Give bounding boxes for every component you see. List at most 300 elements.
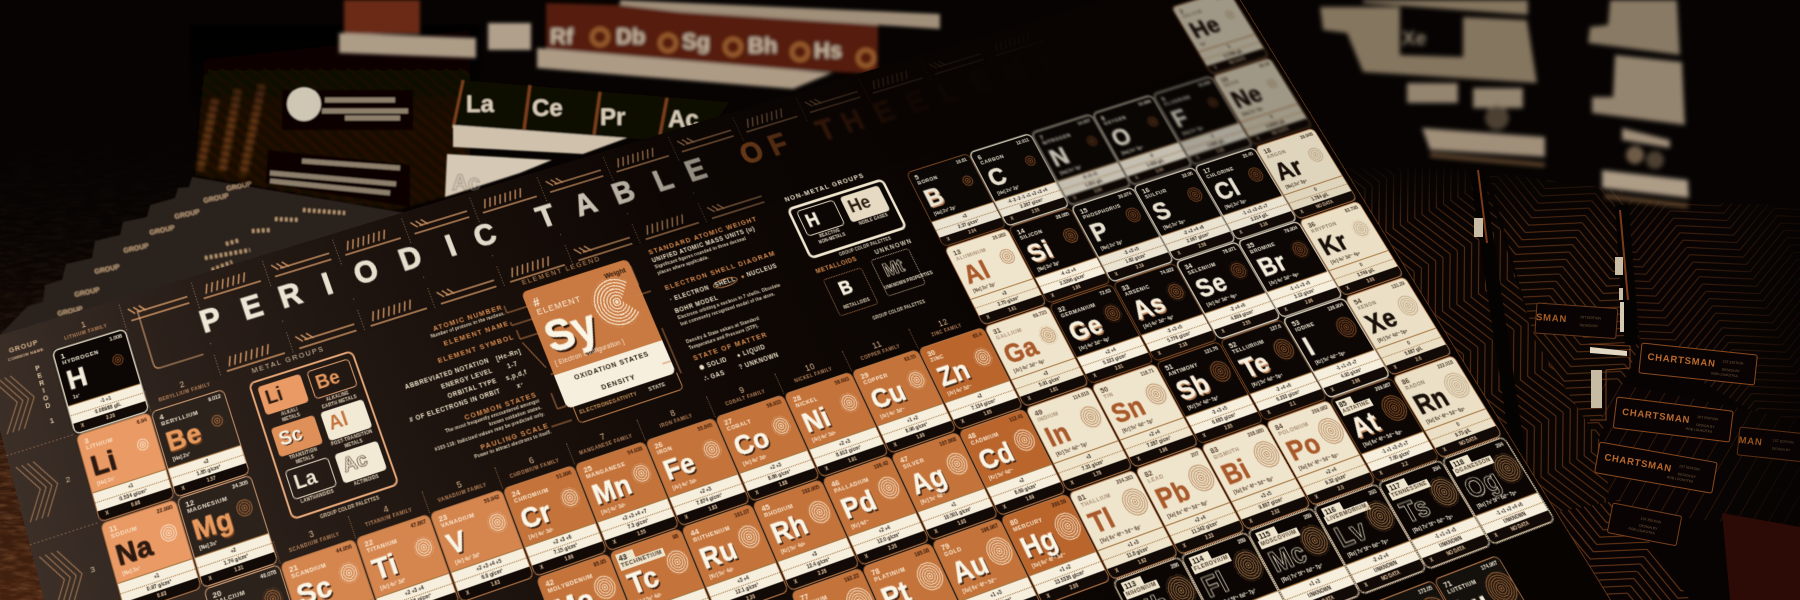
element: zinc: 30 xyxy=(925,348,937,358)
tile: metalloids xyxy=(823,267,879,317)
caption: lanthanoids: LANTHANOIDS xyxy=(300,488,335,504)
element: selenium: 4.809 g/cm³ xyxy=(1230,309,1255,322)
caption: alkali metals: ALKALI xyxy=(280,407,298,417)
period 1 label: 1 xyxy=(49,418,55,426)
element: silicon: -4 +2 +4 xyxy=(1060,267,1077,278)
element: silver: 10.501 g/cm³ xyxy=(943,506,973,522)
element: iodine xyxy=(1284,299,1389,397)
element: gallium: [Ar] 4s² 3d¹⁰ 4p¹ xyxy=(1013,359,1046,375)
element: chromium: 24 xyxy=(510,488,521,499)
element: ruthenium: Ru xyxy=(695,532,742,575)
element: iodine: 53 xyxy=(1290,318,1301,328)
element: beryllium: 9.012 xyxy=(208,394,222,403)
element: sodium: Na xyxy=(112,529,156,572)
element: nickel: [Ar] 4s² 3d⁸ xyxy=(811,430,837,444)
element: tennessine: UNKNOWN xyxy=(1438,535,1464,550)
legend electron configuration: [ Electron Configuration ] xyxy=(554,339,625,367)
note: bohr model xyxy=(523,264,782,328)
element: molybdenum: 42 xyxy=(544,577,555,589)
element: gallium: 1.81 xyxy=(1049,386,1060,395)
element: iron: 26 xyxy=(653,440,664,451)
element: xenon: 2.6 xyxy=(1415,356,1423,363)
element: tellurium xyxy=(1221,320,1326,420)
title: S xyxy=(1122,16,1155,49)
element: boron xyxy=(907,154,1005,246)
element: phosphorus: 15 xyxy=(1078,206,1089,216)
element: arsenic: 33 xyxy=(1120,283,1131,293)
element: molybdenum xyxy=(537,554,642,600)
element: carbon: [He] 2s² 2p² xyxy=(997,185,1021,197)
group label 2 xyxy=(144,369,222,412)
element: technetium xyxy=(610,529,716,600)
element: chromium: 51.996 xyxy=(556,470,573,481)
group label 4 xyxy=(348,492,427,538)
element: copper: 63.55 xyxy=(904,354,917,363)
element: indium: 114.818 xyxy=(1072,391,1091,402)
element: rhodium: Rh xyxy=(766,508,813,550)
legend: electron, shell, nucleus: · ELECTRON SHELL ● NUCLEUS xyxy=(669,263,778,303)
element: silicon: 14 xyxy=(1015,227,1026,236)
title: C xyxy=(468,216,501,254)
element: bismuth: 2.02 xyxy=(1270,508,1282,517)
legend notation column xyxy=(495,264,630,390)
tile: unknown properties: UNKNOWN PROPERTIES xyxy=(884,270,934,290)
element: vanadium: 23 xyxy=(437,512,448,524)
group label 8: 8 xyxy=(669,408,677,418)
group label 9 xyxy=(706,374,782,417)
element: magnesium: Mg xyxy=(189,502,237,546)
element: palladium: 2.20 xyxy=(887,543,898,552)
period 3 label: 3 xyxy=(89,564,96,575)
element: tellurium: 2.1 xyxy=(1289,401,1297,408)
element: sodium: [Ne] 3s¹ xyxy=(122,566,141,578)
element: gallium: 5.91 g/cm³ xyxy=(1038,376,1062,389)
legend element name: ELEMENT xyxy=(535,294,583,318)
note: significant figures: places where applicable. xyxy=(657,255,710,276)
element: oganesson: UNKNOWN xyxy=(1502,511,1528,525)
title: N xyxy=(1064,34,1098,67)
panel: element legend card xyxy=(521,259,676,409)
label: electron shell diagram: ELECTRON SHELL DIAGRAM xyxy=(663,249,777,292)
element: thallium: Tl xyxy=(1083,501,1120,539)
title: L xyxy=(648,162,678,198)
tile: reactive non-metals xyxy=(796,199,845,237)
element: thallium: THALLIUM xyxy=(1080,493,1112,509)
element: nitrogen: NITROGEN xyxy=(1042,133,1072,147)
element: rhodium: RHODIUM xyxy=(763,504,795,519)
element: chromium: CHROMIUM xyxy=(513,488,550,505)
element: thallium: 81 xyxy=(1076,492,1088,503)
element: fluorine: 1.696 g/L xyxy=(1207,139,1226,149)
element: sodium: 22.990 xyxy=(156,505,174,516)
legend oxidation states and density strip xyxy=(554,340,676,409)
note: common states xyxy=(434,264,630,453)
element: argon: Ar xyxy=(1269,153,1308,186)
element: titanium: [Ar] 4s² 3d² xyxy=(380,578,407,592)
element: phosphorus: 30.974 xyxy=(1117,191,1133,200)
element: sodium: 11 xyxy=(108,523,119,534)
element: iodine: I xyxy=(1297,331,1320,361)
element: beryllium xyxy=(152,390,249,496)
caption: reactive non-metals: NON-METALS xyxy=(818,232,846,244)
group label 11: 11 xyxy=(871,339,883,351)
element: scandium xyxy=(281,540,383,600)
element: chlorine: CHLORINE xyxy=(1206,167,1236,180)
caption: alkali metals: METALS xyxy=(281,412,301,422)
element: bismuth: BISMUTH xyxy=(1213,446,1241,461)
element: radon: 222.018 xyxy=(1436,360,1455,371)
element: hydrogen: HYDROGEN xyxy=(62,350,100,367)
element: indium: +3 xyxy=(1085,454,1093,461)
element: lead: LEAD xyxy=(1147,474,1165,485)
element: iridium xyxy=(792,569,900,600)
element: moscovium: 115 xyxy=(1257,529,1272,541)
element: selenium: 78.971 xyxy=(1222,246,1238,256)
element: livermorium: LIVERMORIUM xyxy=(1326,503,1368,523)
element: lutetium: LUTETIUM xyxy=(1447,579,1478,596)
element: mercury: 200.59 xyxy=(1051,499,1068,509)
element: rhodium: [Kr] 5s¹ 4d⁸ xyxy=(780,541,807,556)
element: iodine: IODINE xyxy=(1294,322,1316,334)
group label 3: SCANDIUM FAMILY xyxy=(288,531,341,554)
element: neon: 20.18 xyxy=(1258,62,1271,69)
back poster: blurred red element row: Rf xyxy=(550,24,574,49)
element: chromium: [Ar] 4s¹ 3d⁵ xyxy=(528,527,555,541)
element: thallium: 204.383 xyxy=(1115,475,1135,486)
element: mercury: +1 +2 xyxy=(1058,564,1072,574)
element: boron: +3 xyxy=(961,213,968,220)
card: Chartsman 1: CHARTSMAN xyxy=(1647,352,1716,370)
element: gold xyxy=(933,519,1041,600)
element: tin: +2 +4 xyxy=(1148,429,1161,439)
group label 11 xyxy=(842,330,916,371)
element: lead: 11.342 g/cm³ xyxy=(1191,521,1219,536)
back poster: blurred red element row xyxy=(339,0,940,89)
element: carbon: -4 -3 -2 -1 +1 +2 +3 +4 xyxy=(1007,187,1049,205)
caption: non-metal palettes: GROUP COLOR PALETTES xyxy=(838,236,892,257)
element: polonium: POLONIUM xyxy=(1278,422,1310,438)
element: vanadium: VANADIUM xyxy=(440,513,476,530)
element: sodium xyxy=(101,500,201,600)
element: zinc: 7.134 g/cm³ xyxy=(971,398,997,412)
element: technetium: 98 xyxy=(672,533,680,541)
title: B xyxy=(607,173,640,211)
element: helium: 1s² xyxy=(1199,41,1207,48)
element: oganesson: 118 xyxy=(1451,457,1466,469)
element: gallium xyxy=(985,306,1088,406)
element: gallium: +3 xyxy=(1042,370,1050,378)
group label 12 xyxy=(908,308,982,349)
element: lithium: 6.94 xyxy=(136,417,148,426)
element: sulfur: 32.06 xyxy=(1181,171,1194,180)
element: aluminum: +3 xyxy=(1001,290,1008,297)
element: lead xyxy=(1136,447,1244,554)
element: antimony: Sb xyxy=(1170,368,1216,406)
element: sulfur: 2.067 g/cm³ xyxy=(1186,232,1211,244)
element: hydrogen xyxy=(53,330,148,433)
element: zinc: 1.65 xyxy=(983,409,993,418)
element: scandium: SCANDIUM xyxy=(291,563,327,581)
element: polonium xyxy=(1267,401,1375,505)
element: radon: 86 xyxy=(1400,376,1411,387)
legend symbol: Sy xyxy=(537,300,605,362)
group label 6: CHROMIUM FAMILY xyxy=(509,458,561,480)
element: xenon: Xe xyxy=(1360,302,1403,339)
element: cobalt: 8.86 g/cm³ xyxy=(767,469,792,482)
element: astatine xyxy=(1330,378,1439,481)
element: bromine: 3.12 g/cm³ xyxy=(1294,288,1316,300)
element: nickel: 8.912 g/cm³ xyxy=(835,445,862,459)
element: iron: IRON xyxy=(656,446,674,457)
element: germanium: [Ar] 4s² 3d¹⁰ 4p² xyxy=(1078,337,1111,352)
element: lead: 2.33 xyxy=(1204,533,1215,542)
element: moscovium: 289 xyxy=(1303,513,1313,521)
element: sulfur xyxy=(1134,168,1235,260)
card: Chartsman 1: DESIGN BY xyxy=(1721,367,1741,373)
element: copper: 1.90 xyxy=(915,432,926,441)
period column with chevrons xyxy=(0,376,98,600)
element: arsenic: [Ar] 4s² 3d¹⁰ 4p³ xyxy=(1143,315,1175,330)
element: carbon: 12.011 xyxy=(1015,138,1031,147)
back poster: blurred lanthanide row: Ce xyxy=(532,95,563,122)
tile: metalloids: B xyxy=(835,277,856,300)
element: mercury: 2.00 xyxy=(1069,583,1080,592)
element: ruthenium: 12.1 g/cm³ xyxy=(734,582,760,596)
element: manganese xyxy=(575,442,678,550)
legend weight: Weight xyxy=(603,266,627,280)
element: bromine: 79.904 xyxy=(1283,225,1299,235)
right stacked sheets with copper chevron pattern xyxy=(1300,160,1800,600)
element: lithium: Li xyxy=(87,444,120,482)
element: krypton: 3.749 g/L xyxy=(1356,267,1376,278)
element: oxygen: -2 xyxy=(1148,153,1155,159)
element: oxygen: OXYGEN xyxy=(1103,115,1128,127)
element: radon: 0 xyxy=(1456,422,1461,428)
label: state of matter: STATE OF MATTER xyxy=(692,330,769,362)
element: cobalt: 27 xyxy=(722,416,734,427)
card: Chartsman 3: ROB LOUKOTKA xyxy=(1667,475,1694,484)
element: tellurium: -2 +4 +6 xyxy=(1275,383,1293,393)
element: bismuth: [Xe] 6s² 4f¹⁴ 5d¹⁰ 6p³ xyxy=(1233,476,1275,496)
element: sulfur: [Ne] 3s² 3p⁴ xyxy=(1162,219,1187,231)
tile: transition metals xyxy=(271,415,323,457)
element: xenon: 54 xyxy=(1352,296,1363,307)
element: bromine: 35 xyxy=(1245,240,1256,250)
element: neon: 0.9002 g/L xyxy=(1265,119,1287,130)
title: T xyxy=(531,198,561,234)
element: tennessine: NO DATA xyxy=(1446,545,1467,558)
element: lead: Pb xyxy=(1150,474,1196,515)
legend notation column: x⁷ xyxy=(516,382,525,390)
element: titanium: +2 +3 +4 xyxy=(404,585,425,598)
legend: states of matter xyxy=(523,264,780,383)
caption: alkaline earth metals: EARTH METALS xyxy=(321,393,357,409)
element: radon: 9.73 g/L xyxy=(1454,428,1473,439)
element: flerovium: 289 xyxy=(1237,537,1247,546)
element: iron: 1.83 xyxy=(708,504,719,513)
element: boron: [He] 2s² 2p¹ xyxy=(933,205,957,217)
legend notation column: [He-Rn] xyxy=(495,348,522,363)
element: nihonium: 286 xyxy=(1170,562,1180,571)
element: boron: 2.37 g/cm³ xyxy=(957,218,980,230)
back poster: blurred lanthanide row: La xyxy=(466,91,495,118)
element: nitrogen: 7 xyxy=(1038,133,1045,142)
element: titanium: TITANIUM xyxy=(366,539,399,555)
element: oxygen: [He] 2s² 2p⁴ xyxy=(1121,145,1145,157)
element: iridium: 192.22 xyxy=(843,573,861,584)
element: gold: [Xe] 6s¹ 4f¹⁴ 5d¹⁰ xyxy=(962,577,999,595)
back poster: blurred red element row: Bh xyxy=(748,33,777,58)
element: ruthenium: [Kr] 5s¹ 4d⁷ xyxy=(709,566,735,581)
element: polonium: 2.0 xyxy=(1337,485,1346,493)
element: silver: 47 xyxy=(898,454,910,465)
card: Chartsman 4, partly hidden: SMAN xyxy=(1536,312,1567,325)
card: Chartsman 4, partly hidden: 1ST EDITION xyxy=(1580,315,1602,321)
legend footer frame xyxy=(573,373,684,424)
label: electrons in orbit: # OF ELECTRONS IN ORBIT xyxy=(409,388,502,424)
element: selenium: 2.55 xyxy=(1242,320,1252,328)
element: chlorine xyxy=(1195,148,1296,239)
element: radon: NO DATA xyxy=(1458,436,1479,448)
element: iodine: 126.904 xyxy=(1327,302,1345,313)
element: thallium: 1.62 xyxy=(1137,557,1148,566)
group label 8: IRON FAMILY xyxy=(659,413,694,430)
heading: non-metal groups: NON-METAL GROUPS xyxy=(783,171,866,204)
fan of grey poster sheets with GROUP labels: GROUP xyxy=(203,193,230,205)
element: arsenic: 74.922 xyxy=(1160,267,1175,277)
card: Chartsman 3: CHARTSMAN xyxy=(1603,452,1673,475)
element: astatine: -1 +1 +3 +5 +7 xyxy=(1381,440,1410,456)
element: silver: SILVER xyxy=(902,458,926,471)
title: F xyxy=(763,127,793,162)
element: aluminum: 13 xyxy=(951,247,962,257)
caption: actinoids: ACTINOIDS xyxy=(353,474,380,487)
element: nickel: 28 xyxy=(791,393,803,404)
element: bismuth: 83 xyxy=(1208,445,1220,456)
title: O xyxy=(734,134,769,171)
element: vanadium: 50.942 xyxy=(483,494,501,505)
legend: states of matter: ⬢ SOLID ● LIQUID xyxy=(698,344,767,372)
element: iron: [Ar] 4s² 3d⁶ xyxy=(672,478,698,492)
element: palladium: 12.0 g/cm³ xyxy=(876,532,901,546)
element: phosphorus: PHOSPHORUS xyxy=(1082,204,1122,221)
element: astatine: 2.2 xyxy=(1401,461,1410,469)
back poster: blurred red element row: Hs xyxy=(814,38,842,63)
element: boron: BORON xyxy=(917,175,939,187)
element: thallium: 11.8 g/cm³ xyxy=(1126,546,1150,560)
element: lithium: 0.534 g/cm³ xyxy=(119,488,148,503)
element: polonium: 9.32 g/cm³ xyxy=(1324,473,1348,487)
element: lutetium: 174.967 xyxy=(1480,560,1499,572)
element: chromium: 1.66 xyxy=(564,554,575,563)
element: tin: 1.96 xyxy=(1158,447,1169,455)
card: Chartsman 2: ROB LOUKOTKA xyxy=(1685,427,1713,434)
element: helium: 2 xyxy=(1178,8,1185,15)
period 1 label: D xyxy=(45,402,51,410)
element: bromine: [Ar] 4s² 3d¹⁰ 4p⁵ xyxy=(1268,272,1301,287)
element: aluminum: [Ne] 3s² 3p¹ xyxy=(972,282,997,294)
element: nickel: +2 +3 xyxy=(838,438,852,448)
element: cadmium: [Kr] 5s² 4d¹⁰ xyxy=(988,468,1015,482)
element: helium: 0.1786 g/L xyxy=(1223,49,1244,59)
element: phosphorus: -3 +3 +5 xyxy=(1123,246,1140,256)
element: oxygen: 3.44 xyxy=(1155,167,1165,175)
element: indium: 49 xyxy=(1033,407,1044,418)
card: Chartsman 2: DESIGN BY xyxy=(1696,423,1715,429)
element: rhodium: 45 xyxy=(760,502,771,514)
element: germanium: 32 xyxy=(1056,304,1067,314)
group label 7 xyxy=(566,420,643,464)
element: silicon: 28.085 xyxy=(1055,212,1071,221)
element: chromium: Cr xyxy=(516,495,556,536)
group label 2: BERYLLIUM FAMILY xyxy=(158,382,212,404)
element: gallium: 31 xyxy=(991,326,1003,336)
blurred back poster panel with hatching xyxy=(190,25,480,210)
title: E xyxy=(964,64,997,99)
title: T xyxy=(1095,25,1127,58)
element: ruthenium: +3 +4 xyxy=(736,575,750,585)
element: indium: In xyxy=(1040,416,1076,453)
element: iodine: 2.66 xyxy=(1351,378,1362,386)
element: arsenic: 5.776 g/cm³ xyxy=(1167,331,1192,344)
element: silver: 1.93 xyxy=(957,518,968,527)
element: helium: HELIUM xyxy=(1182,9,1204,20)
card: Chartsman 3: DESIGN BY xyxy=(1677,472,1697,479)
group label 6 xyxy=(494,444,572,489)
tile: reactive non-metals: H xyxy=(802,209,823,232)
element: antimony: 6.685 g/cm³ xyxy=(1211,412,1237,426)
element: magnesium: +2 xyxy=(230,547,237,555)
label: element name: ELEMENT NAME xyxy=(442,319,510,348)
legend atomic number: # xyxy=(530,294,542,310)
tile: alkaline earth metals: Be xyxy=(313,366,343,394)
element: cadmium: Cd xyxy=(973,436,1020,477)
note: common states: known oxidation states. xyxy=(488,405,543,428)
note: density and state xyxy=(523,264,760,352)
element: argon: 39.948 xyxy=(1299,132,1314,141)
element: hydrogen: 1s¹ xyxy=(72,393,81,401)
red table corner xyxy=(1722,513,1800,600)
group label 7: 7 xyxy=(598,431,607,442)
element: palladium: 106.42 xyxy=(873,460,890,471)
element: manganese: [Ar] 4s² 3d⁵ xyxy=(601,502,627,516)
title: H xyxy=(836,103,869,139)
element: silver xyxy=(892,433,997,540)
card: Chartsman 2: CHARTSMAN xyxy=(1622,407,1691,426)
element: livermorium: [Rn] 7s² 5f¹⁴ 6d¹⁰ 7p⁴ xyxy=(1347,538,1390,559)
element: bromine xyxy=(1239,222,1342,317)
card: Chartsman right edge xyxy=(1737,427,1800,463)
element: polonium: 209.982 xyxy=(1311,405,1330,416)
element: rhodium: 12.4 g/cm³ xyxy=(806,557,831,571)
element: chlorine: 35.45 xyxy=(1242,152,1255,160)
title: E xyxy=(868,94,900,129)
element: phosphorus: [Ne] 3s² 3p³ xyxy=(1100,240,1124,252)
element: nickel xyxy=(785,373,888,477)
element: nitrogen: 1.251 g/L xyxy=(1084,178,1104,189)
element: vanadium: [Ar] 4s² 3d³ xyxy=(454,552,481,567)
element: magnesium: MAGNESIUM xyxy=(187,496,229,515)
element: germanium: 5.323 g/cm³ xyxy=(1102,353,1128,366)
element: moscovium: MOSCOVIUM xyxy=(1260,529,1298,548)
element: sulfur: S xyxy=(1147,196,1177,226)
element: xenon: 0 xyxy=(1406,340,1412,347)
element: germanium: 2.01 xyxy=(1114,364,1125,372)
element: bismuth: +3 +5 xyxy=(1260,491,1273,500)
element: beryllium: Be xyxy=(162,417,206,458)
panel: non-metal groups xyxy=(786,178,908,260)
element: beryllium: +2 xyxy=(203,458,210,466)
